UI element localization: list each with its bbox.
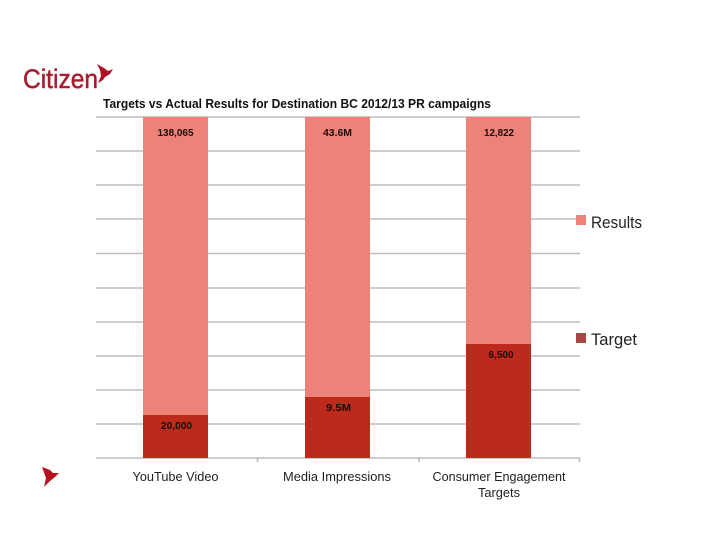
bar: Consumer Engagement Targets: 12,822: [484, 127, 514, 139]
axis labels: YouTube Video: [132, 469, 218, 484]
title: Targets vs Actual Results for Destination BC 2012/13 PR campaigns: [103, 97, 491, 111]
logo: Citizen wordmark with bird: Citizen: [23, 64, 98, 94]
bar: Consumer Engagement Targets: [466, 117, 531, 458]
axis labels: [132, 469, 566, 500]
bar: Media Impressions: [305, 117, 370, 458]
bar: Media Impressions: 43.6M: [323, 127, 352, 139]
bar: YouTube Video: 138,065: [158, 127, 194, 139]
axis labels: Media Impressions: [283, 469, 391, 484]
legend: Target: Target: [591, 330, 637, 349]
bar: Media Impressions: 9.5M: [326, 402, 351, 414]
bar: YouTube Video: 20,000: [161, 420, 192, 432]
bar: Consumer Engagement Targets: 6,500: [488, 349, 514, 361]
legend: Results: Results: [591, 213, 642, 232]
bar: YouTube Video: [143, 117, 208, 458]
axis labels: Consumer Engagement: [432, 469, 566, 484]
icon: bird: [42, 467, 59, 487]
axis labels: Targets: [478, 485, 520, 500]
chart: stacked bars of targets vs results: [96, 117, 580, 500]
